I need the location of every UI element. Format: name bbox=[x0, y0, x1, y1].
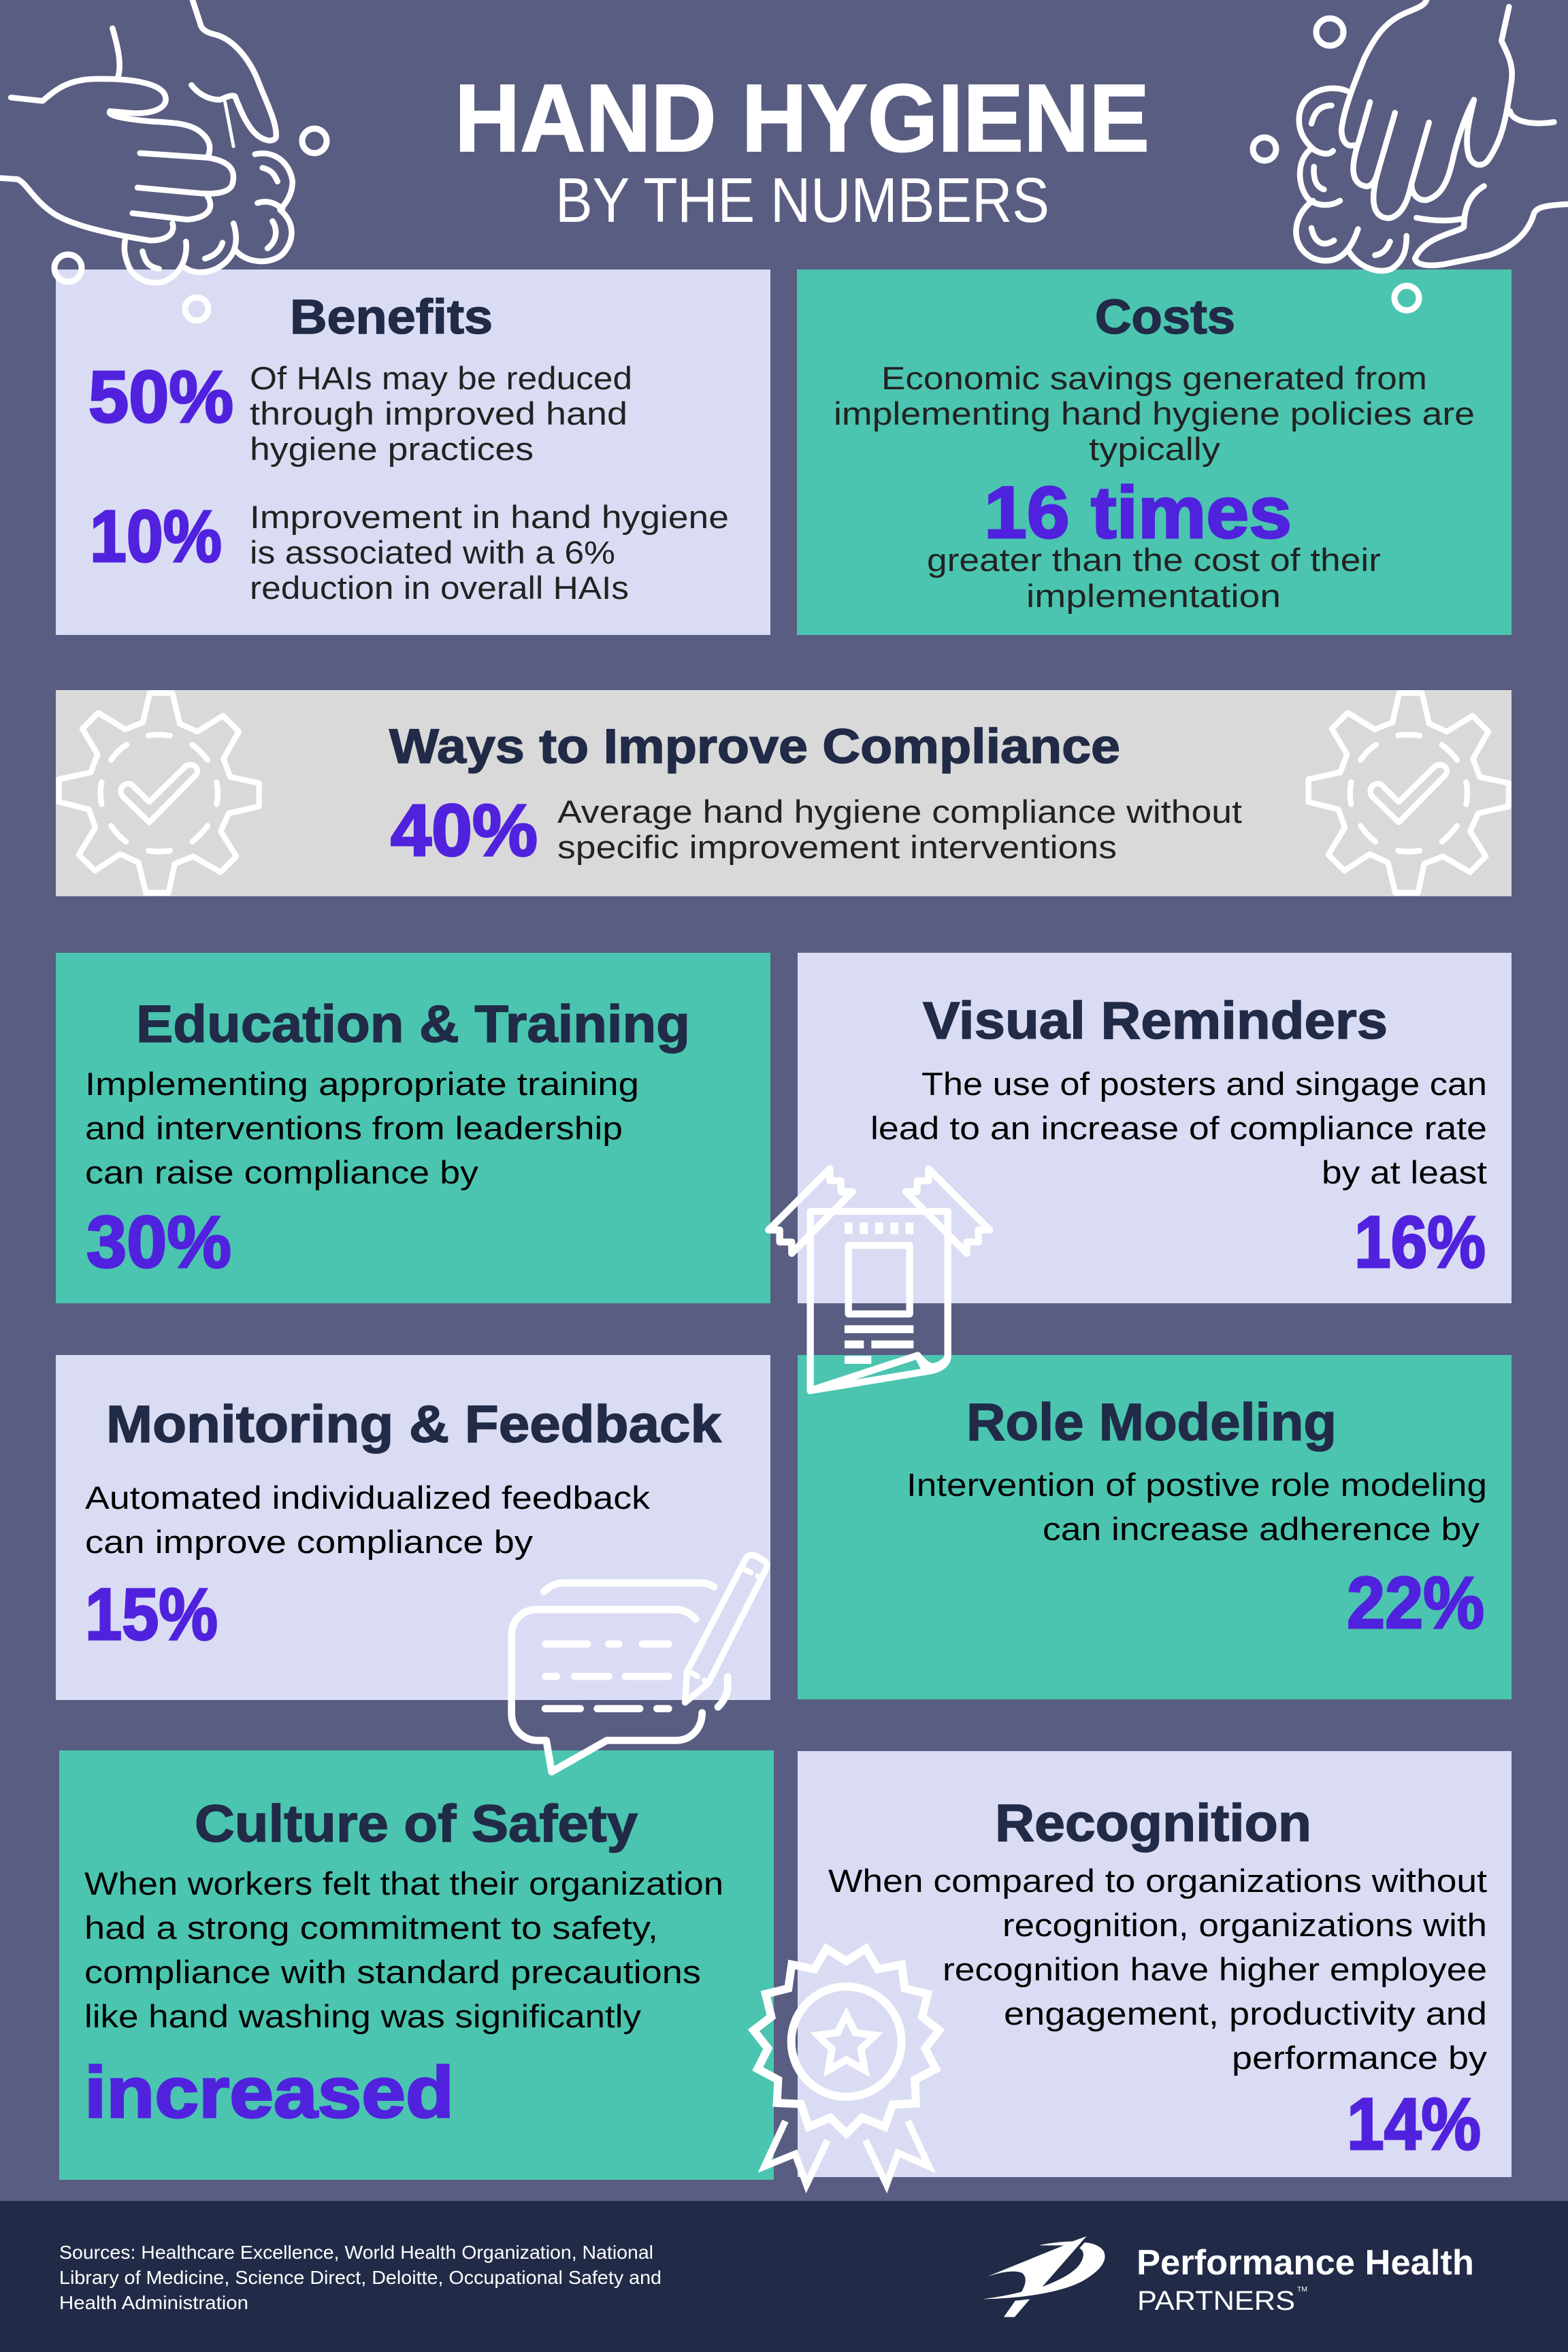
text: visual reminders description: lead to an increase of compliance rate bbox=[870, 1110, 1487, 1146]
text: monitoring description: Automated individualized feedback bbox=[85, 1480, 651, 1516]
icon: poster bbox=[768, 1169, 990, 1390]
text: sources bbox=[59, 2242, 662, 2313]
heading: recognition: Recognition bbox=[995, 1794, 1311, 1852]
heading: culture of safety: Culture of Safety bbox=[195, 1795, 638, 1853]
text: costs intro: implementing hand hygiene policies are bbox=[834, 395, 1475, 431]
stat: 16 times: 16 times bbox=[984, 471, 1292, 553]
trademark mark: TM bbox=[1297, 2286, 1307, 2293]
text: 50% description: through improved hand bbox=[250, 395, 627, 431]
text: education description: and interventions from leadership bbox=[85, 1110, 623, 1146]
text: 50% description: Of HAIs may be reduced bbox=[250, 360, 632, 396]
text: 50% description bbox=[250, 360, 632, 467]
text: education description bbox=[85, 1066, 639, 1190]
heading: benefits: Benefits bbox=[290, 291, 493, 344]
text: costs intro: typically bbox=[1089, 431, 1221, 467]
text: costs outro: implementation bbox=[1026, 578, 1281, 614]
text: education description: Implementing appropriate training bbox=[85, 1066, 639, 1102]
text: 10% description: is associated with a 6% bbox=[250, 534, 615, 570]
heading: education and training: Education & Training bbox=[136, 995, 690, 1054]
text: sources: Sources: Healthcare Excellence, World Health Organization, National bbox=[59, 2242, 653, 2263]
icon: performance health partners logo bbox=[982, 2236, 1105, 2317]
heading: costs: Costs bbox=[1095, 291, 1235, 344]
icon: gear with check, left bbox=[59, 693, 259, 893]
panel: costs bbox=[797, 270, 1512, 635]
text: culture description: compliance with standard precautions bbox=[84, 1954, 701, 1990]
text: recognition description: recognition, organizations with bbox=[1002, 1907, 1487, 1943]
text: culture description: had a strong commitment to safety, bbox=[84, 1910, 658, 1946]
text: 40% description: Average hand hygiene compliance without bbox=[557, 794, 1242, 830]
logo wordmark: partners: PARTNERS bbox=[1137, 2286, 1295, 2316]
icon: washing hands, left bbox=[0, 0, 327, 321]
text: visual reminders description: The use of posters and singage can bbox=[921, 1066, 1487, 1102]
text: recognition description bbox=[828, 1863, 1488, 2076]
text: costs outro: greater than the cost of their bbox=[927, 542, 1381, 578]
stat: 30%: 30% bbox=[86, 1200, 231, 1283]
heading: visual reminders: Visual Reminders bbox=[923, 992, 1388, 1050]
subtitle: by the numbers: BY THE NUMBERS bbox=[555, 165, 1049, 235]
text: recognition description: engagement, productivity and bbox=[1004, 1995, 1487, 2031]
stat: 14%: 14% bbox=[1347, 2082, 1481, 2165]
stat: 50%: 50% bbox=[88, 355, 233, 438]
text: monitoring description: can improve compliance by bbox=[85, 1524, 534, 1560]
heading: ways to improve compliance: Ways to Improve Compliance bbox=[389, 720, 1120, 774]
panel: benefits bbox=[56, 270, 770, 635]
text: 40% description: specific improvement interventions bbox=[557, 829, 1117, 865]
text: visual reminders description bbox=[870, 1066, 1487, 1190]
stat: 16%: 16% bbox=[1354, 1200, 1486, 1283]
text: 10% description: reduction in overall HAIs bbox=[250, 570, 629, 606]
text: education description: can raise compliance by bbox=[85, 1154, 479, 1190]
text: costs intro bbox=[834, 360, 1475, 467]
panel: monitoring and feedback bbox=[56, 1355, 770, 1700]
text: 50% description: hygiene practices bbox=[250, 431, 534, 467]
text: culture description: like hand washing was significantly bbox=[84, 1998, 642, 2034]
text: culture description: When workers felt that their organization bbox=[84, 1865, 723, 1901]
icon: speech bubble and pen bbox=[512, 1555, 767, 1771]
text: recognition description: When compared to organizations without bbox=[828, 1863, 1487, 1899]
text: 10% description bbox=[250, 499, 729, 606]
panel: role modeling bbox=[798, 1355, 1512, 1699]
text: role modeling description: can increase adherence by bbox=[1043, 1511, 1480, 1547]
icon: gear with check, right bbox=[1309, 693, 1509, 893]
icon: award ribbon badge bbox=[753, 1948, 939, 2185]
panel: visual reminders bbox=[798, 953, 1512, 1303]
stat: increased: increased bbox=[84, 2053, 454, 2133]
text: role modeling description: Intervention of postive role modeling bbox=[906, 1467, 1487, 1503]
text: sources: Library of Medicine, Science Direct, Deloitte, Occupational Safety and bbox=[59, 2267, 662, 2288]
stat: 40%: 40% bbox=[391, 789, 538, 871]
panel: education and training bbox=[56, 953, 770, 1303]
logo wordmark: performance health: Performance Health bbox=[1137, 2243, 1474, 2283]
stat: 22%: 22% bbox=[1347, 1561, 1484, 1644]
text: culture description bbox=[84, 1865, 723, 2034]
stat: 15%: 15% bbox=[85, 1573, 218, 1655]
panel: culture of safety bbox=[59, 1750, 774, 2180]
text: recognition description: performance by bbox=[1232, 2040, 1488, 2076]
text: monitoring description bbox=[85, 1480, 651, 1560]
text: visual reminders description: by at least bbox=[1322, 1154, 1487, 1190]
text: 10% description: Improvement in hand hygiene bbox=[250, 499, 729, 535]
panel: recognition bbox=[798, 1751, 1512, 2177]
text: costs outro bbox=[927, 542, 1381, 614]
footer band bbox=[0, 2201, 1568, 2352]
icon: washing hands, right bbox=[1253, 0, 1568, 310]
text: costs intro: Economic savings generated from bbox=[881, 360, 1427, 396]
heading: monitoring and feedback: Monitoring & Feedback bbox=[106, 1395, 721, 1454]
heading: role modeling: Role Modeling bbox=[966, 1393, 1337, 1452]
panel: ways to improve compliance bbox=[56, 690, 1512, 896]
text: role modeling description bbox=[906, 1467, 1487, 1547]
text: sources: Health Administration bbox=[59, 2292, 248, 2313]
stat: 10%: 10% bbox=[90, 495, 222, 577]
text: recognition description: recognition have higher employee bbox=[943, 1951, 1487, 1987]
title: hand hygiene: HAND HYGIENE bbox=[455, 64, 1149, 172]
text: 40% description bbox=[557, 794, 1242, 865]
